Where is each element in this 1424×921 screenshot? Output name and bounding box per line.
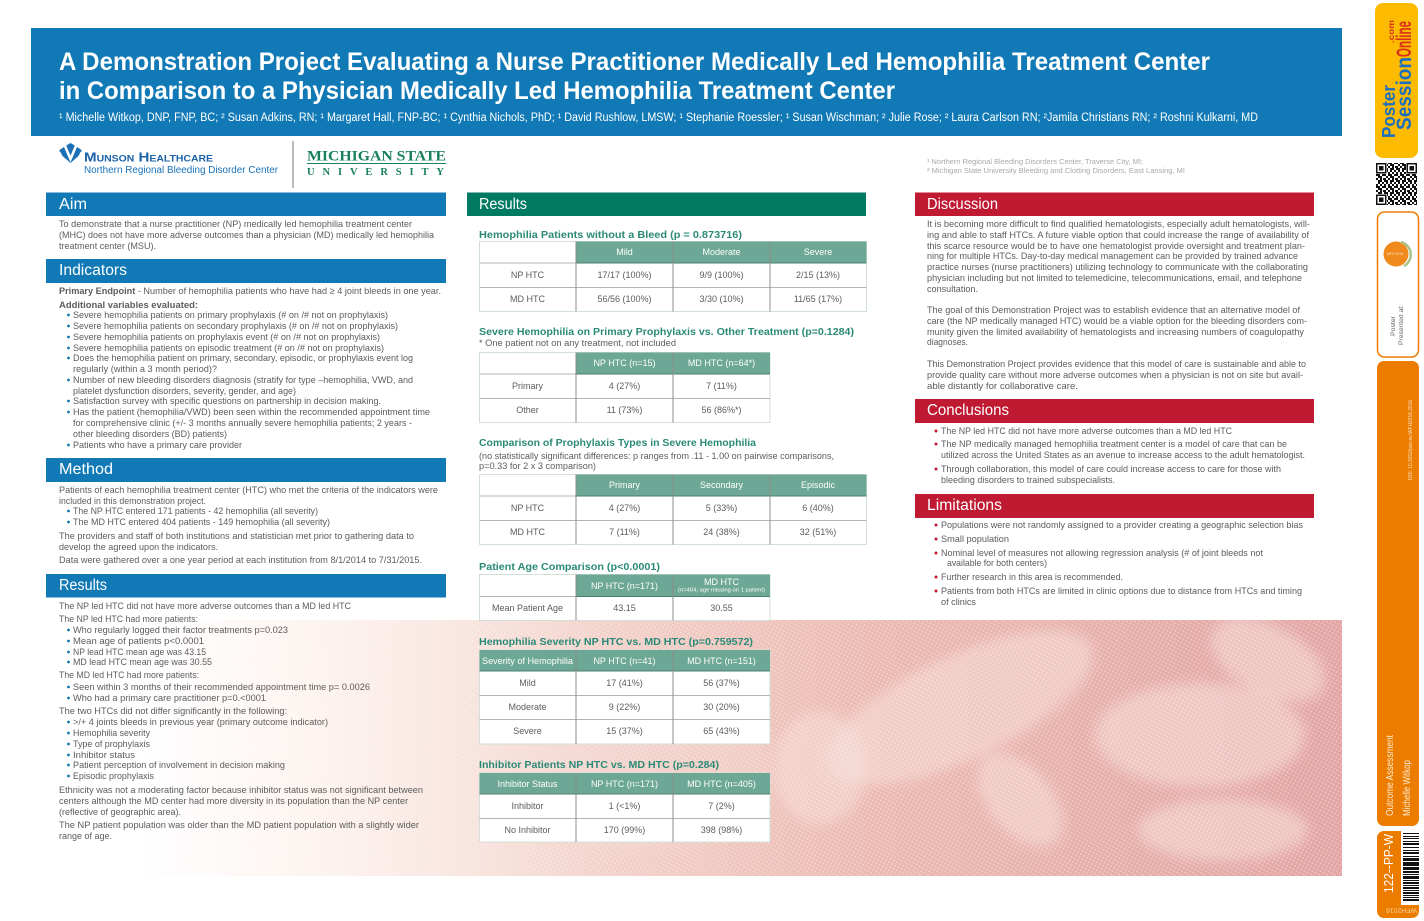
table: hemophilia severity: NP HTC (n=41)	[593, 656, 656, 666]
panel: indicators	[46, 259, 446, 451]
table: prophylaxis types: 24 (38%)	[703, 527, 740, 537]
table: hemophilia severity: Moderate	[508, 702, 547, 712]
sidebar: presented at card: Presented at:	[1398, 305, 1405, 345]
title: A Demonstration Project Evaluating a Nurse Practitioner Medically Led Hemophilia Treatment Center	[59, 48, 1210, 76]
table: patients without a bleed: Moderate	[702, 247, 741, 257]
table: patients without a bleed: 56/56 (100%)	[597, 294, 652, 304]
aim text: treatment center (MSU).	[59, 241, 156, 252]
table: primary prophylaxis vs other: NP HTC (n=15)	[593, 358, 656, 368]
logo: Michigan State University: MICHIGAN STATE	[307, 148, 446, 164]
additional variables list: Severe hemophilia patients on episodic treatment (# on /# not on prophylaxis)	[73, 343, 384, 354]
table: patient age: NP HTC (n=171)	[591, 581, 658, 591]
table: patients without a bleed: 11/65 (17%)	[794, 294, 842, 304]
panel: results summary	[46, 574, 446, 842]
sidebar: PosterSessionOnline logo: Poster	[1379, 85, 1399, 138]
table: hemophilia severity: Mild	[519, 678, 536, 688]
table: inhibitor patients: 1 (<1%)	[609, 801, 640, 811]
discussion text: munity given the limited availability of hematologists and increasing numbers of coagulopathy	[927, 327, 1304, 338]
heading: prophylaxis table	[479, 326, 854, 349]
discussion text: The goal of this Demonstration Project was to establish evidence that an alternative model of	[927, 305, 1300, 316]
discussion text: ing and able to staff HTCs. A future viable option that could increase the range of availability of	[927, 230, 1309, 241]
additional variables list: Severe hemophilia patients on prophylaxis event (# on /# not on prophylaxis)	[73, 332, 380, 343]
table: patients without a bleed: Severe	[804, 247, 832, 257]
table: primary prophylaxis vs other: 56 (86%*)	[701, 405, 742, 415]
barcode	[1401, 831, 1419, 905]
aim text: To demonstrate that a nurse practitioner (NP) medically led hemophilia treatment center	[59, 219, 412, 230]
table: inhibitor patients: 398 (98%)	[701, 825, 742, 835]
icon: congress logo	[1384, 242, 1411, 266]
sidebar: orange info strip: DOI: 10.3252/pso.eu.WFH2016.2016	[1408, 400, 1414, 480]
results text: Patient perception of involvement in decision making	[73, 760, 285, 771]
table: inhibitor patients: No Inhibitor	[504, 825, 551, 835]
method text: develop the agreed upon the indicators.	[59, 542, 218, 553]
limitations list: Small population	[941, 534, 1009, 545]
table: prophylaxis types: Primary	[609, 480, 640, 490]
results text: The MD led HTC had more patients:	[59, 670, 199, 681]
logo: Michigan State University: UNIVERSITY	[307, 167, 444, 178]
header banner	[31, 28, 1342, 136]
limitations list: of clinics	[941, 597, 976, 608]
table: prophylaxis types: 6 (40%)	[802, 503, 834, 513]
icon: Munson V mark	[59, 143, 82, 163]
results text: The NP led HTC had more patients:	[59, 614, 198, 625]
additional variables list: Severe hemophilia patients on secondary prophylaxis (# on /# not on prophylaxis)	[73, 321, 398, 332]
table: hemophilia severity: 15 (37%)	[606, 726, 643, 736]
method text: The providers and staff of both institutions and statistician met prior to gathering data to	[59, 531, 414, 542]
method text	[59, 485, 438, 566]
heading: prophylaxis types table: p=0.33 for 2 x 3 comparison)	[479, 461, 596, 472]
sidebar: orange info strip: Michelle Witkop	[1402, 760, 1413, 816]
table: patients without a bleed: Mild	[616, 247, 633, 257]
table: primary prophylaxis vs other: 4 (27%)	[609, 381, 640, 391]
table: primary prophylaxis vs other: Other	[516, 405, 539, 415]
logo: Michigan State University	[307, 148, 446, 178]
table: patients without a bleed	[480, 242, 866, 312]
results text: Episodic prophylaxis	[73, 771, 154, 782]
table: prophylaxis types: 5 (33%)	[706, 503, 737, 513]
table: primary prophylaxis vs other: 11 (73%)	[607, 405, 642, 415]
logo: Munson Healthcare: Munson Healthcare	[84, 150, 213, 164]
discussion text: physician including but not limited to telemedicine, telecommunications, email, and telephone	[927, 273, 1302, 284]
results text: The NP patient population was older than the MD patient population with a slightly wider	[59, 820, 419, 831]
heading: prophylaxis types table	[479, 437, 834, 472]
discussion text: diagnoses.	[927, 337, 968, 348]
additional variables list: Satisfaction survey with specific questions on partnership in decision making.	[73, 396, 381, 407]
table: primary prophylaxis vs other	[480, 352, 770, 422]
results text: Type of prophylaxis	[73, 739, 150, 750]
table: inhibitor patients: MD HTC (n=405)	[687, 779, 756, 789]
table: primary prophylaxis vs other: MD HTC (n=64*)	[688, 358, 755, 368]
table: inhibitor patients: 170 (99%)	[604, 825, 645, 835]
limitations list: Further research in this area is recommended.	[941, 572, 1123, 583]
results text: Inhibitor status	[73, 750, 135, 761]
table: hemophilia severity: 30 (20%)	[703, 702, 740, 712]
heading: inhibitor table: Inhibitor Patients NP HTC vs. MD HTC (p=0.284)	[479, 759, 719, 771]
sidebar: presented at card	[1378, 212, 1418, 357]
limitations list: available for both centers)	[947, 558, 1047, 569]
heading: age table: Patient Age Comparison (p<0.0001)	[479, 561, 660, 573]
sidebar: poster number and barcode: 122--PP-W	[1381, 833, 1396, 893]
method text: Patients of each hemophilia treatment center (HTC) who met the criteria of the indicators were	[59, 485, 438, 496]
panel: results heading: Results	[479, 196, 527, 213]
table: primary prophylaxis vs other: Primary	[512, 381, 543, 391]
results text	[59, 601, 423, 842]
sidebar: presented at card: Poster	[1390, 315, 1397, 336]
table: primary prophylaxis vs other: 7 (11%)	[706, 381, 737, 391]
conclusions list: bleeding disorders to trained subspecialists.	[941, 475, 1115, 486]
sidebar: orange info strip	[1377, 361, 1419, 826]
additional variables list: other bleeding disorders (BD) patients)	[73, 429, 227, 440]
conclusions list: utilized across the United States as an avenue to increase access to the adult hematologist.	[941, 450, 1305, 461]
discussion text: ning for multiple HTCs. Day-to-day medical management can be provided by trained advance	[927, 251, 1298, 262]
table: hemophilia severity: Severe	[513, 726, 542, 736]
table: prophylaxis types: Episodic	[801, 480, 836, 490]
additional variables list: platelet dysfunction disorders, severity, gender, and age)	[73, 386, 296, 397]
table: patient age: Mean Patient Age	[492, 603, 563, 613]
aim text	[59, 219, 435, 252]
sidebar: orange info strip: Outcome Assessment	[1385, 735, 1396, 816]
primary endpoint: Primary Endpoint - Number of hemophilia patients who have had ≥ 4 joint bleeds in one year.	[59, 286, 441, 297]
conclusions list: The NP led HTC did not have more adverse outcomes than a MD led HTC	[941, 426, 1232, 437]
table: prophylaxis types	[480, 474, 866, 544]
table: patient age: MD HTC	[704, 577, 739, 587]
discussion text: This Demonstration Project provides evidence that this model of care is sustainable and able to	[927, 359, 1306, 370]
results text: >/+ 4 joints bleeds in previous year (primary outcome indicator)	[73, 717, 328, 728]
table: inhibitor patients: Inhibitor Status	[497, 779, 558, 789]
table: patients without a bleed: 9/9 (100%)	[699, 270, 744, 280]
authors: ¹ Michelle Witkop, DNP, FNP, BC; ² Susan Adkins, RN; ¹ Margaret Hall, FNP-BC; ¹ Cynthia Nichols, PhD; ¹ David Rushlow, LMSW; ¹ Stephanie Roessler; ¹ Susan Wischman; ² Julie Rose; ² Laura Carlson RN; ²Jamila Christians RN; ² Roshni Kulkarni, MD	[59, 112, 1258, 124]
panel: limitations: Limitations	[927, 497, 1002, 514]
additional variables list: Does the hemophilia patient on primary, secondary, episodic, or prophylaxis event log	[73, 353, 413, 364]
affiliations	[927, 157, 1185, 175]
panel: method: Method	[59, 461, 113, 478]
table: patient age: 30.55	[710, 603, 733, 613]
panel: aim	[46, 192, 446, 252]
table: inhibitor patients: 7 (2%)	[708, 801, 735, 811]
additional variables list: regularly (within a 3 month period)?	[73, 364, 217, 375]
table: hemophilia severity: 65 (43%)	[703, 726, 740, 736]
discussion text: practice nurses (nurse practitioners) utilizing technology to communicate with the collaborating	[927, 262, 1308, 273]
background: pink halftone band	[229, 620, 1342, 876]
results text: range of age.	[59, 831, 112, 842]
method text: The NP HTC entered 171 patients - 42 hemophilia (all severity)	[73, 506, 318, 517]
panel: conclusions: Conclusions	[927, 402, 1009, 419]
panel: limitations	[915, 494, 1314, 608]
results text: Mean age of patients p<0.0001	[73, 636, 204, 647]
table: prophylaxis types: Secondary	[700, 480, 744, 490]
sidebar: QR code	[1376, 163, 1417, 205]
additional variables list: Number of new bleeding disorders diagnosis (stratify for type –hemophilia, VWD, and	[73, 375, 413, 386]
limitations list	[934, 520, 1303, 608]
heading: prophylaxis table: Severe Hemophilia on Primary Prophylaxis vs. Other Treatment (p=0.1284)	[479, 326, 854, 338]
table: hemophilia severity	[480, 650, 770, 744]
discussion text: consultation.	[927, 284, 978, 295]
table: patient age: 43.15	[613, 603, 636, 613]
affiliations: ² Michigan State University Bleeding and Clotting Disorders, East Lansing, MI	[927, 166, 1185, 175]
additional variables list: Severe hemophilia patients on primary prophylaxis (# on /# not on prophylaxis)	[73, 310, 388, 321]
method text: included in this demonstration project.	[59, 496, 206, 507]
sidebar: poster number and barcode	[1377, 831, 1419, 918]
conclusions list: Through collaboration, this model of care could increase access to care for those with	[941, 464, 1281, 475]
panel: conclusions	[915, 399, 1314, 486]
panel: method	[46, 458, 446, 566]
results text: MD lead HTC mean age was 30.55	[73, 657, 212, 668]
logo: Munson Healthcare: Northern Regional Bleeding Disorder Center	[84, 165, 279, 176]
discussion text: able distantly for collaborative care.	[927, 381, 1078, 392]
method text: Data were gathered over a one year period at each institution from 8/1/2014 to 7/31/2015.	[59, 555, 422, 566]
table: inhibitor patients	[480, 773, 770, 842]
panel: aim: Aim	[59, 196, 87, 213]
table: hemophilia severity: 56 (37%)	[703, 678, 740, 688]
heading: severity table: Hemophilia Severity NP HTC vs. MD HTC (p=0.759572)	[479, 636, 753, 648]
title: in Comparison to a Physician Medically Led Hemophilia Treatment Center	[59, 77, 895, 105]
table: inhibitor patients: Inhibitor	[511, 801, 544, 811]
table: prophylaxis types: 32 (51%)	[800, 527, 836, 537]
panel: results summary: Results	[59, 577, 107, 594]
heading: prophylaxis types table: Comparison of Prophylaxis Types in Severe Hemophilia	[479, 437, 756, 449]
results text: The two HTCs did not differ significantly in the following:	[59, 706, 287, 717]
limitations list: Patients from both HTCs are limited in clinic options due to distance from HTCs and timing	[941, 586, 1302, 597]
heading: prophylaxis table: * One patient not on any treatment, not included	[479, 338, 676, 349]
table: inhibitor patients: NP HTC (n=171)	[591, 779, 658, 789]
table: patients without a bleed: 17/17 (100%)	[597, 270, 652, 280]
table: patients without a bleed: 2/15 (13%)	[796, 270, 840, 280]
results text: The NP led HTC did not have more adverse outcomes than a MD led HTC	[59, 601, 351, 612]
limitations list: Populations were not randomly assigned to a provider creating a geographic selection bias	[941, 520, 1303, 531]
table: patients without a bleed: 3/30 (10%)	[699, 294, 744, 304]
additional variables list: Additional variables evaluated:	[59, 300, 198, 311]
additional variables list: for comprehensive clinic (+/- 3 months annually severe hemophilia patients; 2 years -	[73, 418, 412, 429]
discussion text: this scarce resource would be to have one hematologist provide oversight and treatment plan-	[927, 241, 1305, 252]
discussion text	[927, 219, 1310, 392]
sidebar: poster number and barcode: WFH2016	[1386, 906, 1417, 914]
discussion text: provide quality care without more adverse outcomes when a physician is not on site but avail-	[927, 370, 1303, 381]
table: patient age: (n=404; age missing on 1 patient)	[678, 588, 765, 594]
results text: Who regularly logged their factor treatments p=0.023	[73, 625, 288, 636]
table: patients without a bleed: MD HTC	[510, 294, 545, 304]
method text: The MD HTC entered 404 patients - 149 hemophilia (all severity)	[73, 517, 330, 528]
table: hemophilia severity: 17 (41%)	[606, 678, 643, 688]
results text: Who had a primary care practitioner p=0.<0001	[73, 693, 266, 704]
conclusions list	[934, 426, 1305, 486]
logo: Munson Healthcare	[59, 143, 279, 176]
results text: Ethnicity was not a moderating factor because inhibitor status was not significant between	[59, 785, 423, 796]
table: prophylaxis types: 7 (11%)	[609, 527, 640, 537]
title	[59, 48, 1210, 105]
results text: (reflective of geographic area).	[59, 807, 181, 818]
results text: Hemophilia severity	[73, 728, 150, 739]
icon: congress logo: WFH 2016	[1387, 252, 1403, 256]
panel: discussion	[915, 192, 1314, 392]
panel: discussion: Discussion	[927, 196, 998, 213]
table: prophylaxis types: NP HTC	[511, 503, 545, 513]
conclusions list: The NP medically managed hemophilia treatment center is a model of care that can be	[941, 439, 1287, 450]
discussion text: care (the NP medically managed HTC) would be a viable option for the bleeding disorders com-	[927, 316, 1307, 327]
aim text: (MHC) does not have more adverse outcomes than a physician (MD) medically led hemophilia	[59, 230, 435, 241]
table: patients without a bleed: NP HTC	[511, 270, 545, 280]
additional variables list	[59, 300, 430, 451]
heading: bleed table: Hemophilia Patients without a Bleed (p = 0.873716)	[479, 229, 742, 241]
additional variables list: Has the patient (hemophilia/VWD) been seen within the recommended appointment time	[73, 407, 430, 418]
heading: prophylaxis types table: (no statistically significant differences: p ranges from .11 - 1.00 on pairwise comparisons,	[479, 451, 834, 462]
results text: centers although the MD center had more diversity in its population than the NP center	[59, 796, 408, 807]
limitations list: Nominal level of measures not allowing regression analysis (# of joint bleeds not	[941, 548, 1263, 559]
affiliations: ¹ Northern Regional Bleeding Disorders Center, Traverse City, MI;	[927, 157, 1143, 166]
results text: NP lead HTC mean age was 43.15	[73, 647, 206, 658]
table: hemophilia severity: Severity of Hemophilia	[482, 656, 573, 666]
sidebar: PosterSessionOnline logo: .com	[1387, 20, 1396, 43]
table: prophylaxis types: MD HTC	[510, 527, 545, 537]
table: hemophilia severity: 9 (22%)	[609, 702, 640, 712]
panel: indicators: Indicators	[59, 262, 127, 279]
additional variables list: Patients who have a primary care provider	[73, 440, 242, 451]
table: hemophilia severity: MD HTC (n=151)	[687, 656, 756, 666]
sidebar: PosterSessionOnline logo: Session	[1393, 57, 1416, 130]
panel: results heading	[467, 192, 866, 216]
sidebar: PosterSessionOnline logo	[1375, 3, 1418, 158]
table: patient age	[480, 574, 770, 620]
results text: Seen within 3 months of their recommended appointment time p= 0.0026	[73, 682, 370, 693]
discussion text: It is becoming more difficult to find qualified hematologists, especially adult hematologists, will-	[927, 219, 1310, 230]
table: prophylaxis types: 4 (27%)	[609, 503, 640, 513]
